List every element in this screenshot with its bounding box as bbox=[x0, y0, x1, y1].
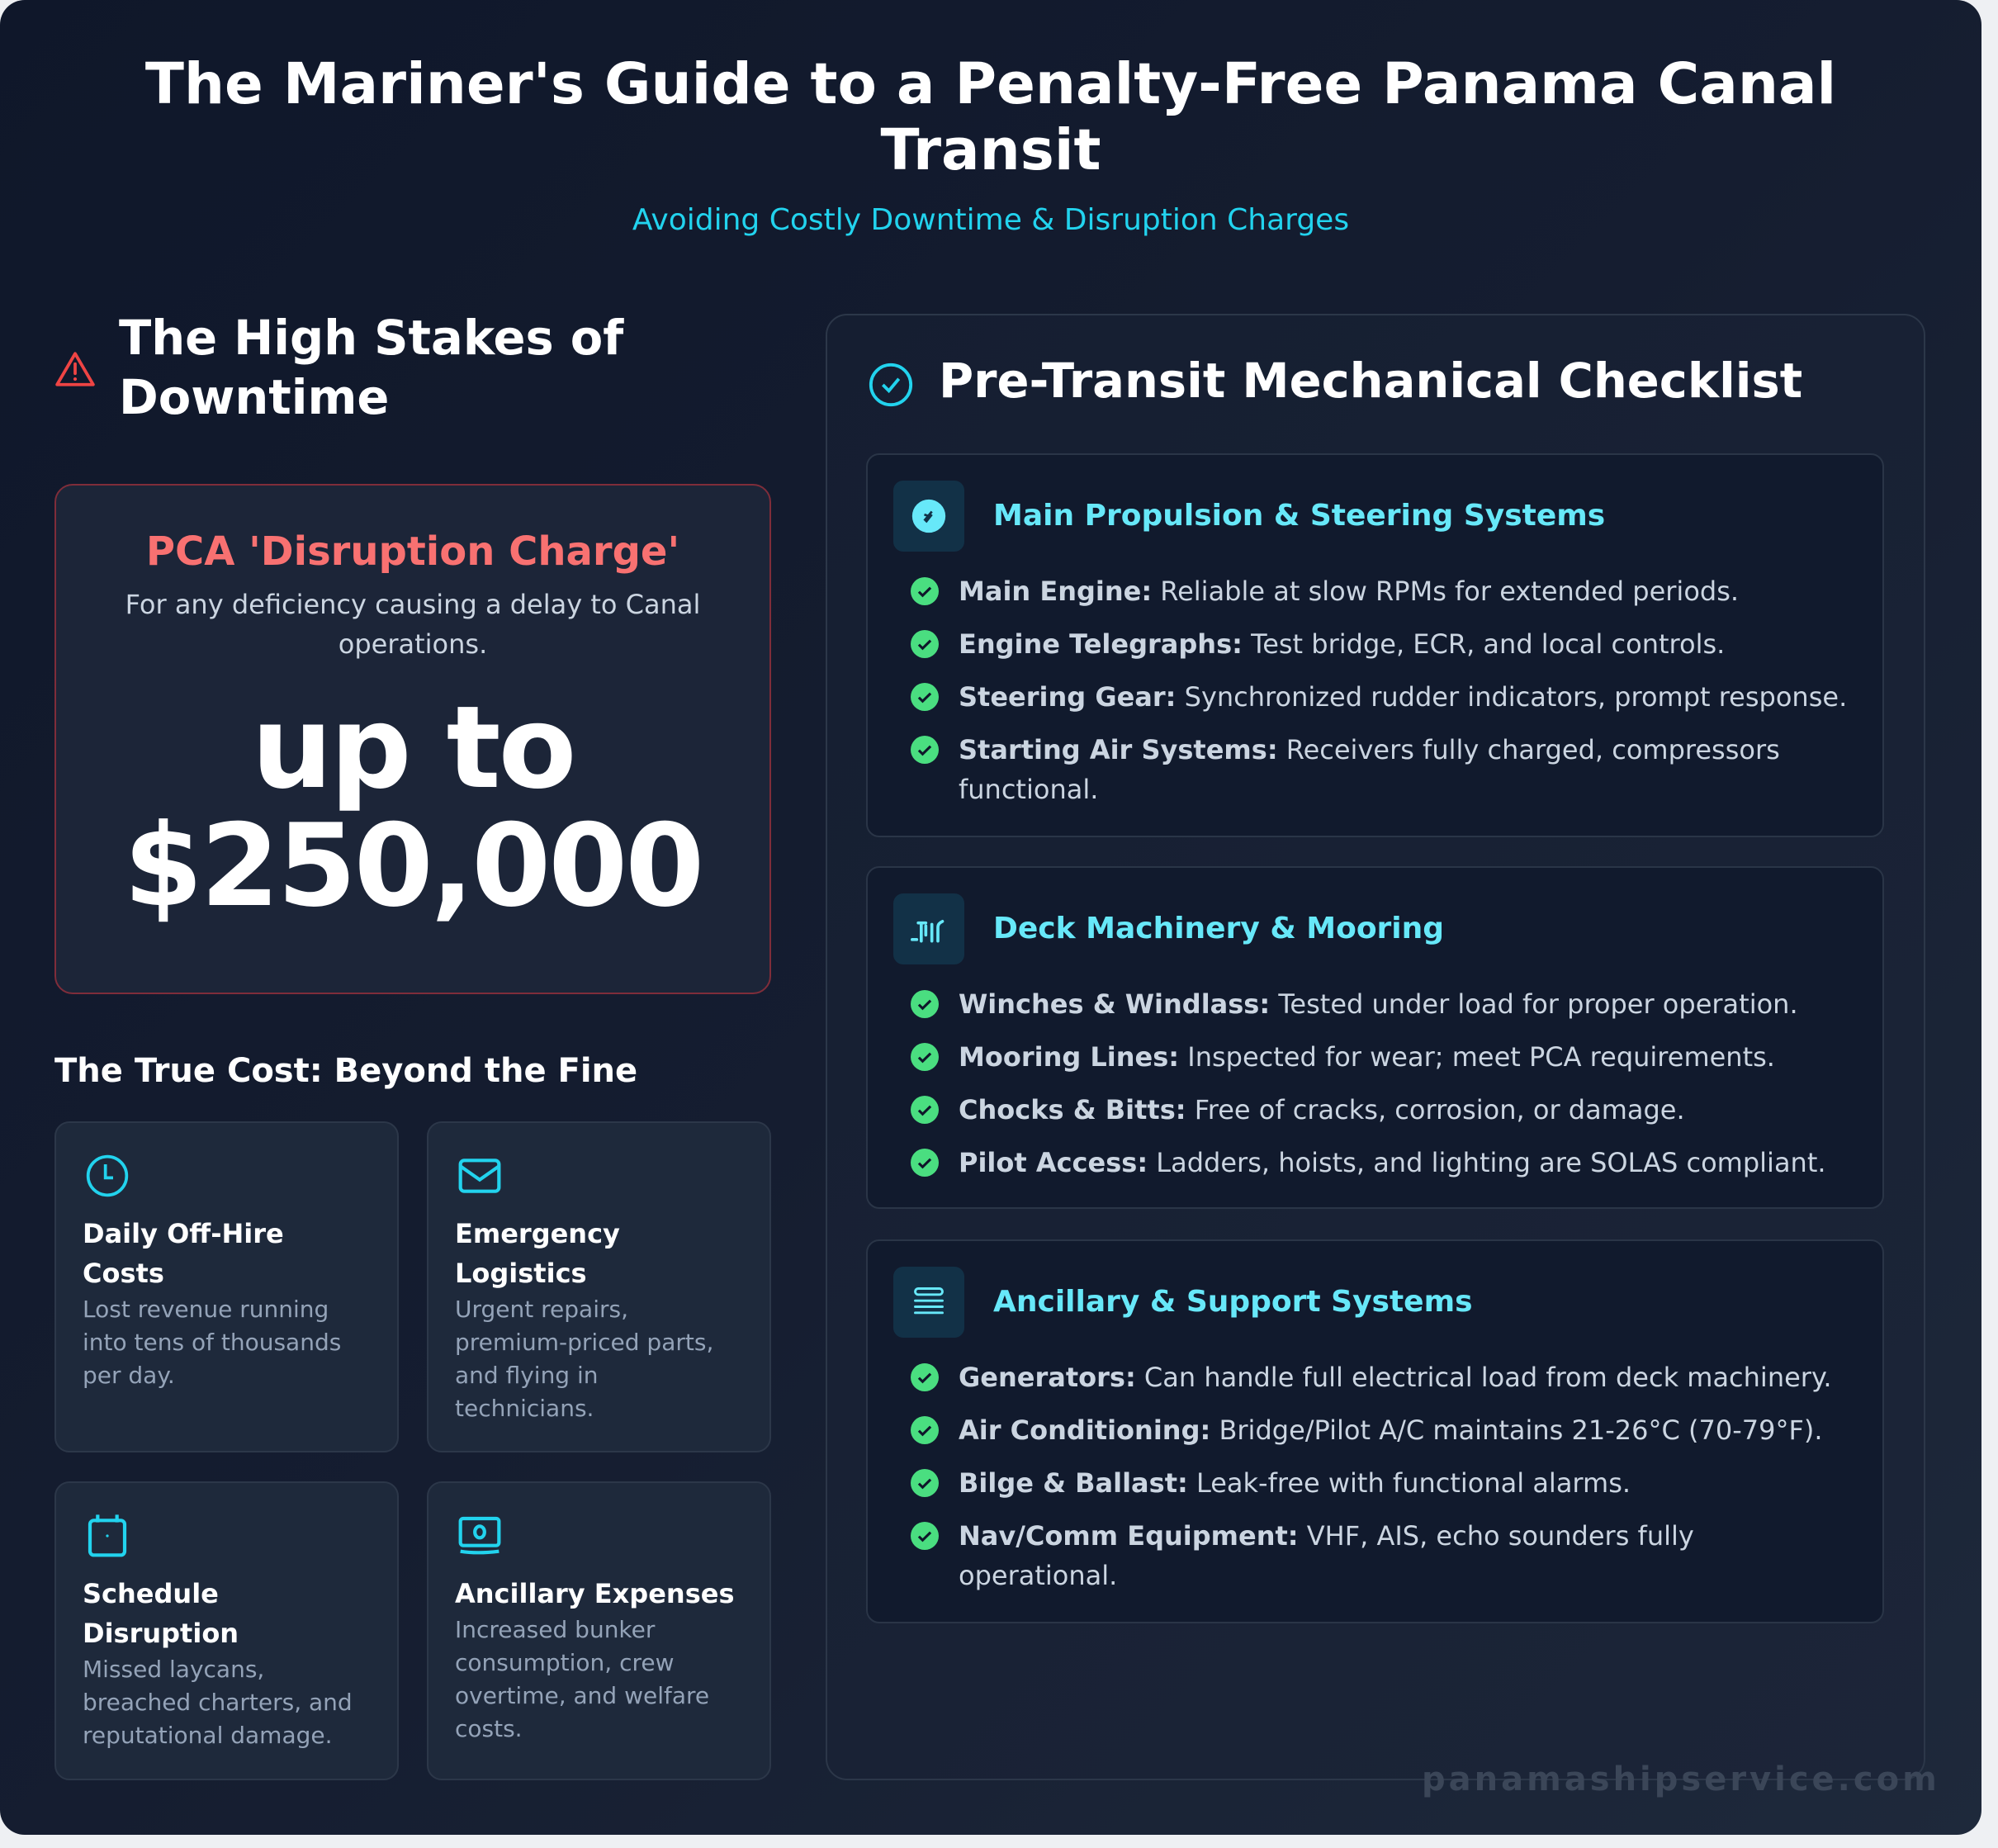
section: propulsion bbox=[866, 453, 1884, 837]
icon: money bbox=[459, 1516, 500, 1554]
card: schedule: breached charters, and bbox=[83, 1689, 353, 1716]
icon: calendar bbox=[88, 1514, 127, 1557]
section: ancillary systems: Bilge & Ballast: Leak-free with functional alarms. bbox=[959, 1467, 1631, 1499]
section: ancillary systems: Air Conditioning: Bridge/Pilot A/C maintains 21-26°C (70-79°F). bbox=[959, 1414, 1823, 1446]
panel: checklist bbox=[826, 314, 1925, 1780]
section: propulsion: Steering Gear: Synchronized rudder indicators, prompt response. bbox=[959, 681, 1847, 713]
icon: propeller bbox=[893, 481, 964, 552]
card: ancillary expenses: overtime, and welfare bbox=[455, 1682, 709, 1709]
callout: disruption charge: up to bbox=[252, 681, 574, 814]
card: ancillary expenses: Increased bunker bbox=[455, 1616, 655, 1643]
card: off-hire: into tens of thousands bbox=[83, 1329, 341, 1356]
title bbox=[145, 51, 1836, 183]
heading: high stakes: Downtime bbox=[119, 370, 389, 425]
section: ancillary systems: Nav/Comm Equipment: VHF, AIS, echo sounders fully operational. bbox=[959, 1520, 1694, 1591]
heading: high stakes: The High Stakes of bbox=[119, 310, 623, 366]
card: logistics: Logistics bbox=[455, 1258, 587, 1289]
title: The Mariner's Guide to a Penalty-Free Panama Canal bbox=[145, 51, 1836, 117]
section: ancillary systems bbox=[866, 1239, 1884, 1623]
section: deck machinery: Chocks & Bitts: Free of cracks, corrosion, or damage. bbox=[959, 1094, 1685, 1125]
card: schedule: reputational damage. bbox=[83, 1722, 333, 1749]
card: ancillary expenses: consumption, crew bbox=[455, 1649, 675, 1676]
section: propulsion: Starting Air Systems: Receivers fully charged, compressors functional. bbox=[959, 734, 1780, 805]
card: logistics: and flying in bbox=[455, 1362, 599, 1389]
icon: warning bbox=[55, 352, 95, 386]
card: off-hire: Costs bbox=[83, 1258, 164, 1289]
section: deck machinery bbox=[866, 866, 1884, 1209]
callout: disruption charge: $250,000 bbox=[124, 799, 702, 932]
card: ancillary expenses: costs. bbox=[455, 1715, 523, 1742]
section: propulsion: Main Engine: Reliable at slow RPMs for extended periods. bbox=[959, 576, 1739, 607]
card: ancillary expenses: Ancillary Expenses bbox=[455, 1578, 734, 1609]
section: ancillary systems: Ancillary & Support Systems bbox=[993, 1285, 1473, 1319]
subtitle: Avoiding Costly Downtime & Disruption Charges bbox=[632, 203, 1349, 237]
callout: disruption charge: For any deficiency causing a delay to Canal operations. bbox=[125, 589, 700, 660]
icon: stack bbox=[893, 1267, 964, 1338]
section: deck machinery: Winches & Windlass: Tested under load for proper operation. bbox=[959, 988, 1798, 1020]
card: schedule: Disruption bbox=[83, 1618, 239, 1649]
card: logistics: technicians. bbox=[455, 1395, 594, 1422]
callout: disruption charge: PCA 'Disruption Charge' bbox=[146, 528, 679, 575]
card: logistics: Emergency bbox=[455, 1218, 620, 1249]
title: Transit bbox=[881, 117, 1101, 183]
card: off-hire: Lost revenue running bbox=[83, 1296, 329, 1323]
card: logistics bbox=[427, 1121, 771, 1452]
heading: true cost: The True Cost: Beyond the Fine bbox=[54, 1052, 637, 1090]
watermark: panamashipservice.com bbox=[1422, 1760, 1940, 1798]
icon: clock bbox=[86, 1154, 129, 1197]
icon: check circle bbox=[869, 363, 913, 406]
section: deck machinery: Deck Machinery & Mooring bbox=[993, 912, 1444, 945]
section: deck machinery: Mooring Lines: Inspected for wear; meet PCA requirements. bbox=[959, 1041, 1775, 1073]
card: logistics: Urgent repairs, bbox=[455, 1296, 628, 1323]
card: off-hire: Daily Off-Hire bbox=[83, 1218, 284, 1249]
card: schedule: Schedule bbox=[83, 1578, 219, 1609]
section: propulsion: Engine Telegraphs: Test bridge, ECR, and local controls. bbox=[959, 628, 1725, 660]
card: off-hire bbox=[54, 1121, 399, 1452]
card: logistics: premium-priced parts, bbox=[455, 1329, 713, 1356]
icon: envelope bbox=[459, 1159, 500, 1193]
section: deck machinery: Pilot Access: Ladders, hoists, and lighting are SOLAS compliant. bbox=[959, 1147, 1826, 1178]
card: schedule: Missed laycans, bbox=[83, 1656, 264, 1683]
heading: high stakes bbox=[55, 310, 624, 425]
icon: winch bbox=[893, 893, 964, 964]
card: ancillary expenses bbox=[427, 1481, 771, 1780]
heading: checklist: Pre-Transit Mechanical Checklist bbox=[939, 353, 1802, 409]
card: schedule bbox=[54, 1481, 399, 1780]
card: off-hire: per day. bbox=[83, 1362, 175, 1389]
callout: disruption charge bbox=[54, 484, 771, 994]
section: ancillary systems: Generators: Can handle full electrical load from deck machinery. bbox=[959, 1362, 1831, 1393]
section: propulsion: Main Propulsion & Steering Systems bbox=[993, 499, 1605, 533]
